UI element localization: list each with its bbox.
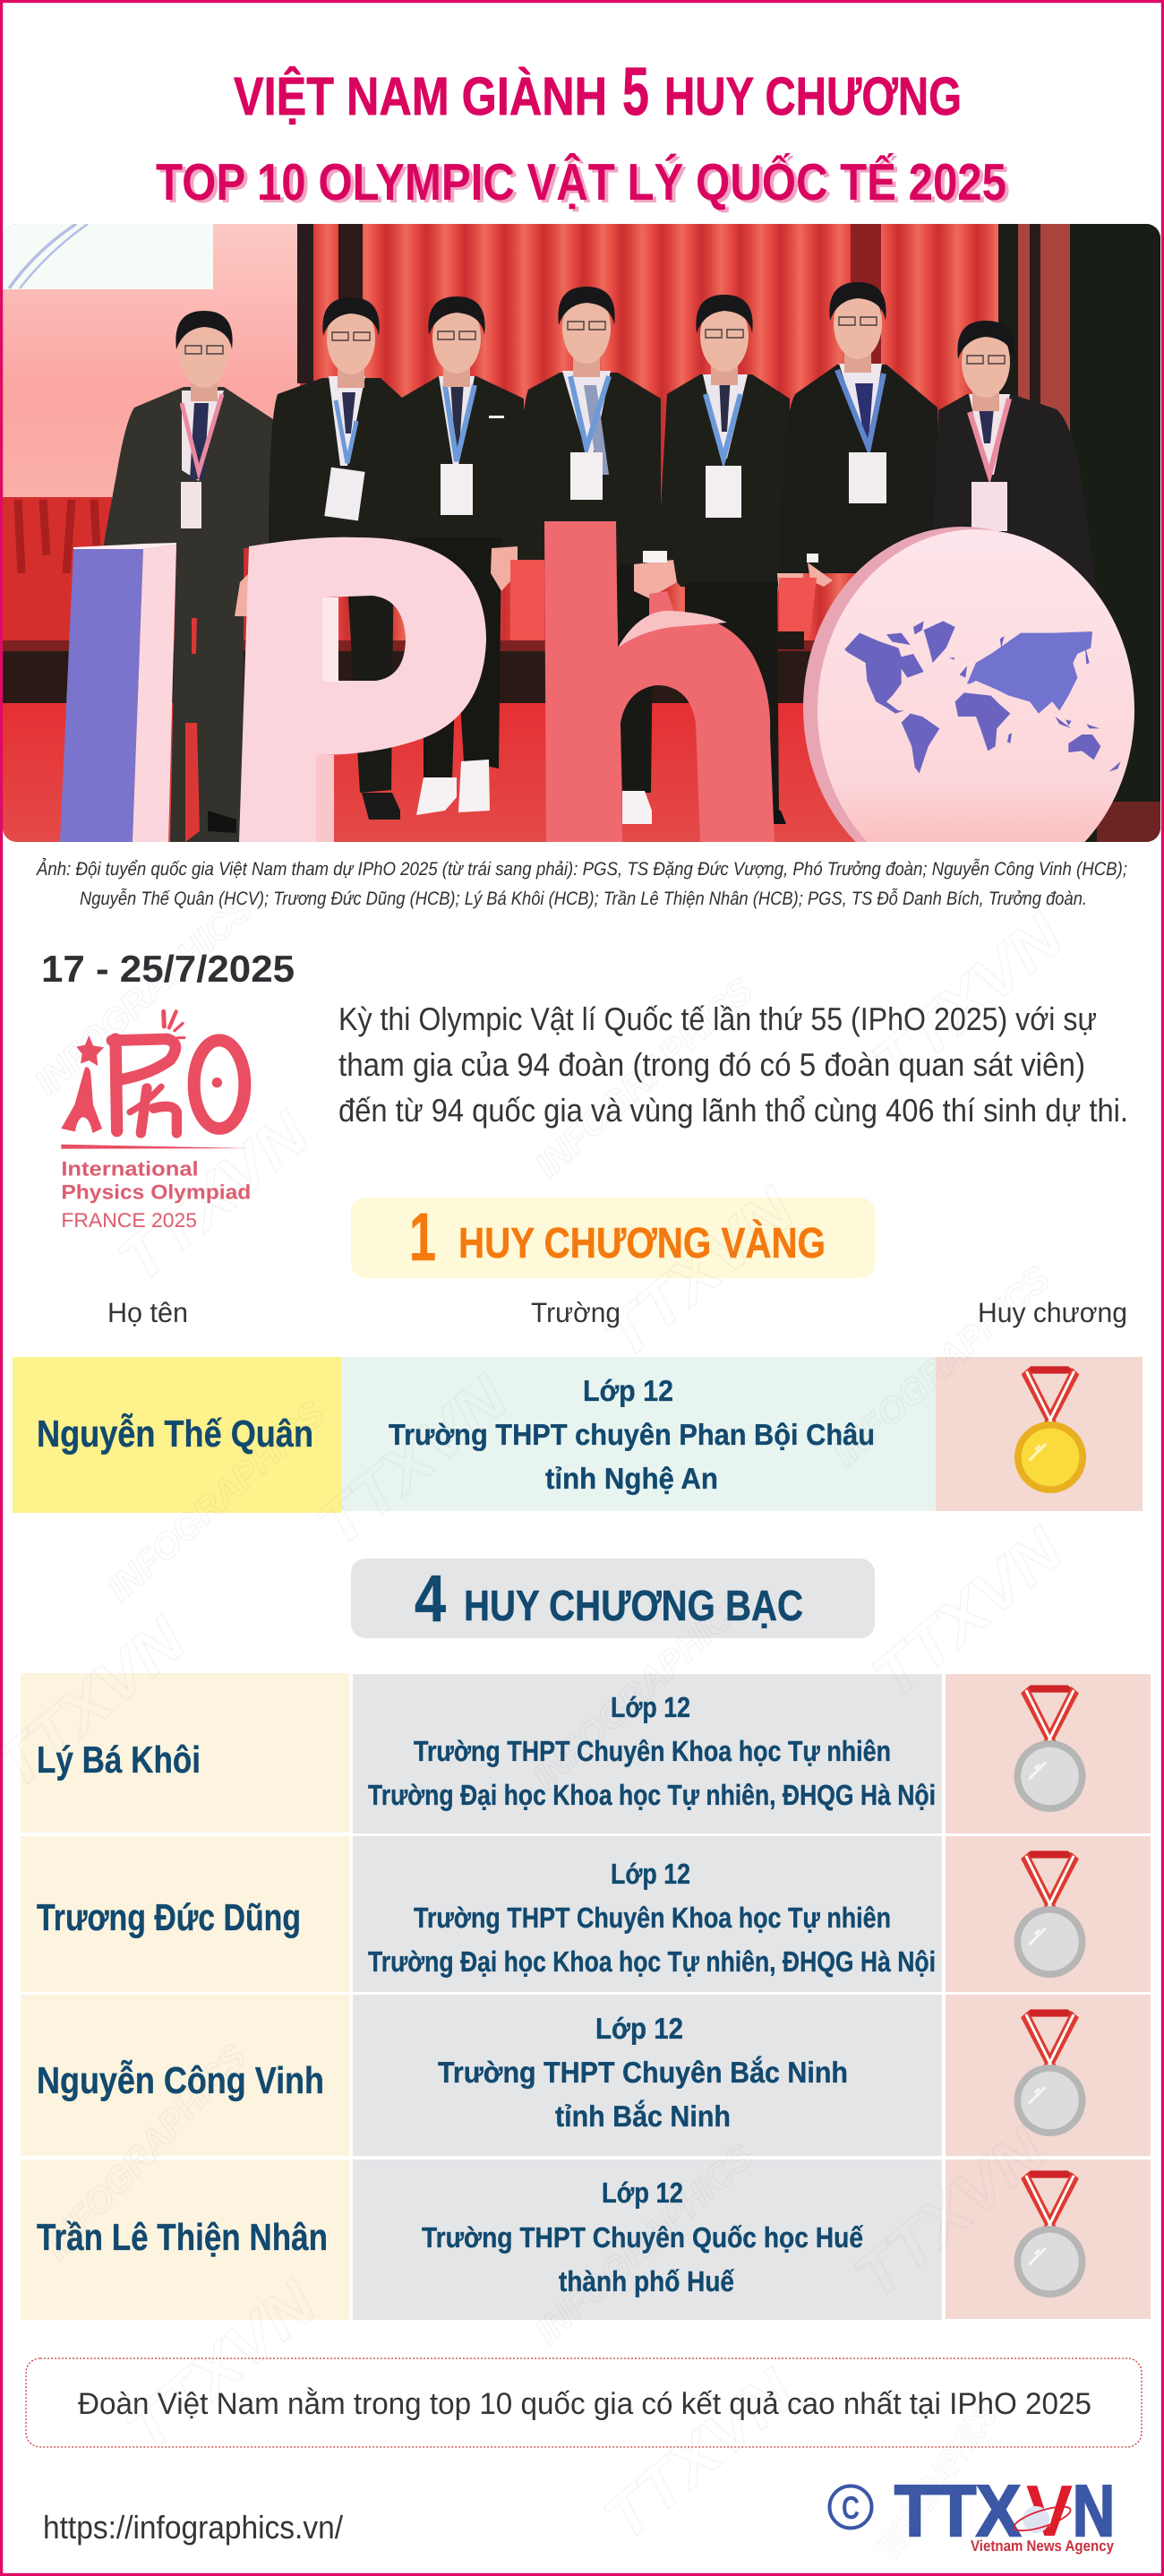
- watermark: TTXVN: [860, 1514, 1076, 1712]
- heading: silver medals: [351, 1558, 875, 1638]
- school: thành phố Huế: [559, 2265, 734, 2297]
- world map: [844, 621, 1121, 773]
- callout: [26, 2358, 1142, 2447]
- intro paragraph: tham gia của 94 đoàn (trong đó có 5 đoàn quan sát viên): [338, 1046, 1085, 1083]
- name: Lý Bá Khôi: [37, 1739, 201, 1781]
- IPhO logo: [61, 1011, 251, 1232]
- gold winner school: Trường THPT chuyên Phan Bội Châu: [389, 1418, 875, 1451]
- school: Lớp 12: [602, 2177, 683, 2209]
- title: [156, 54, 1010, 214]
- watermark: TTXVN: [304, 1361, 521, 1559]
- watermark: INFOGRAPHICS: [36, 2037, 254, 2267]
- logo wordmark: FRANCE 2025: [61, 1209, 197, 1232]
- icon: silver medal: [1014, 1685, 1085, 1812]
- heading: silver medals: 4: [415, 1561, 446, 1636]
- person 1: [103, 311, 276, 842]
- name: Trần Lê Thiện Nhân: [37, 2216, 328, 2258]
- source url: https://infographics.vn/: [43, 2509, 343, 2546]
- watermark: INFOGRAPHICS: [528, 2136, 761, 2352]
- title line two: TOP 10 OLYMPIC VẬT LÝ QUỐC TẾ 2025: [159, 156, 1010, 214]
- watermark: INFOGRAPHICS: [826, 1258, 1058, 1474]
- TTXVN logo: V: [1026, 2471, 1073, 2552]
- school: Trường Đại học Khoa học Tự nhiên, ĐHQG Hà Nội: [368, 1945, 936, 1978]
- heading: gold medal: HUY CHƯƠNG VÀNG: [458, 1219, 826, 1267]
- icon: silver medal: [1014, 2009, 1085, 2136]
- title line two: TOP 10 OLYMPIC VẬT LÝ QUỐC TẾ 2025: [156, 153, 1006, 211]
- icon: gold medal: [1014, 1366, 1086, 1493]
- school: Lớp 12: [595, 2012, 683, 2045]
- watermark: INFOGRAPHICS: [100, 1394, 333, 1610]
- heading: gold medal: 1: [409, 1199, 436, 1275]
- TTXVN logo: TTX: [894, 2471, 1021, 2552]
- silver row 1: [21, 1673, 1151, 1833]
- silver row 4: [21, 2160, 1151, 2320]
- heading: silver medals: HUY CHƯƠNG BẠC: [464, 1583, 803, 1630]
- watermark: TTXVN: [591, 2356, 808, 2554]
- table column headers: Huy chương: [978, 1297, 1127, 1328]
- gold winner name: Nguyễn Thế Quân: [37, 1413, 313, 1455]
- school: Trường Đại học Khoa học Tự nhiên, ĐHQG Hà Nội: [368, 1779, 936, 1811]
- hands: [235, 546, 833, 616]
- table column headers: Họ tên: [107, 1297, 188, 1328]
- heading: gold medal: [351, 1198, 875, 1278]
- person 2: [269, 297, 403, 820]
- school: [368, 1691, 936, 1811]
- red curtain gaps between the letters: [510, 560, 817, 640]
- table column headers: [107, 1297, 1127, 1328]
- name: Trương Đức Dũng: [37, 1896, 301, 1938]
- silver row 2: [21, 1836, 1151, 1992]
- TTXVN logo: Vietnam News Agency: [971, 2537, 1114, 2555]
- school: Trường THPT Chuyên Bắc Ninh: [438, 2056, 848, 2089]
- name: Nguyễn Công Vinh: [37, 2059, 324, 2101]
- title line one: [234, 54, 962, 130]
- gold winner school: tỉnh Nghệ An: [545, 1462, 718, 1495]
- school: Trường THPT Chuyên Quốc học Huế: [422, 2221, 863, 2254]
- school: Trường THPT Chuyên Khoa học Tự nhiên: [414, 1902, 891, 1934]
- logo wordmark: [61, 1157, 251, 1232]
- school: [438, 2012, 848, 2133]
- school: [422, 2177, 863, 2297]
- title line one: VIỆT NAM GIÀNH: [234, 66, 607, 126]
- letter P: [239, 537, 486, 842]
- icon: silver medal: [1014, 1850, 1085, 1978]
- gold winner school: [389, 1374, 875, 1495]
- team photo illustration: [0, 224, 1164, 891]
- person 7: [931, 321, 1097, 591]
- watermark: INFOGRAPHICS: [869, 2397, 1005, 2566]
- school: Lớp 12: [611, 1858, 690, 1890]
- letter I: [60, 543, 176, 842]
- intro paragraph: [338, 1000, 1128, 1129]
- watermark: TTXVN: [860, 900, 1076, 1098]
- school: Lớp 12: [611, 1691, 690, 1723]
- logo wordmark: International: [61, 1157, 199, 1181]
- person 6: [777, 282, 937, 649]
- watermark: INFOGRAPHICS: [28, 888, 261, 1103]
- icon: silver medal: [1014, 2170, 1085, 2297]
- watermark: TTXVN: [106, 1097, 322, 1295]
- letter h: [544, 521, 775, 842]
- TTXVN logo: [894, 2471, 1115, 2555]
- icon: copyright: C: [842, 2489, 860, 2526]
- table column headers: Trường: [531, 1297, 621, 1328]
- logo wordmark: Physics Olympiad: [61, 1181, 251, 1203]
- watermark: [0, 888, 1076, 2566]
- school: Trường THPT Chuyên Khoa học Tự nhiên: [414, 1735, 891, 1767]
- watermark: TTXVN: [113, 2267, 330, 2465]
- school: [368, 1858, 936, 1978]
- icon: copyright: [829, 2486, 872, 2528]
- watermark: INFOGRAPHICS: [528, 970, 761, 1186]
- gold winner school: Lớp 12: [583, 1374, 673, 1407]
- silver row 3: [21, 1995, 1151, 2156]
- person 4: [518, 287, 661, 824]
- title line one: 5: [622, 54, 649, 130]
- TTXVN logo: N: [1073, 2471, 1115, 2552]
- school: tỉnh Bắc Ninh: [555, 2099, 731, 2133]
- watermark: INFOGRAPHICS: [526, 1582, 758, 1798]
- watermark: TTXVN: [591, 1173, 808, 1371]
- person 5: [658, 295, 790, 824]
- letter O with world map: [803, 527, 1134, 842]
- photo caption: [35, 857, 1127, 909]
- logo mark: [61, 1011, 251, 1149]
- gold medal row: [13, 1357, 1143, 1513]
- title line one: HUY CHƯƠNG: [664, 66, 962, 126]
- watermark: TTXVN: [842, 2114, 1058, 2312]
- callout: Đoàn Việt Nam nằm trong top 10 quốc gia có kết quả cao nhất tại IPhO 2025: [78, 2387, 1091, 2421]
- stage backdrop: [0, 224, 1164, 842]
- intro paragraph: Kỳ thi Olympic Vật lí Quốc tế lần thứ 55 (IPhO 2025) với sự: [338, 1000, 1097, 1037]
- date: 17 - 25/7/2025: [41, 948, 295, 990]
- person 3: [394, 296, 524, 815]
